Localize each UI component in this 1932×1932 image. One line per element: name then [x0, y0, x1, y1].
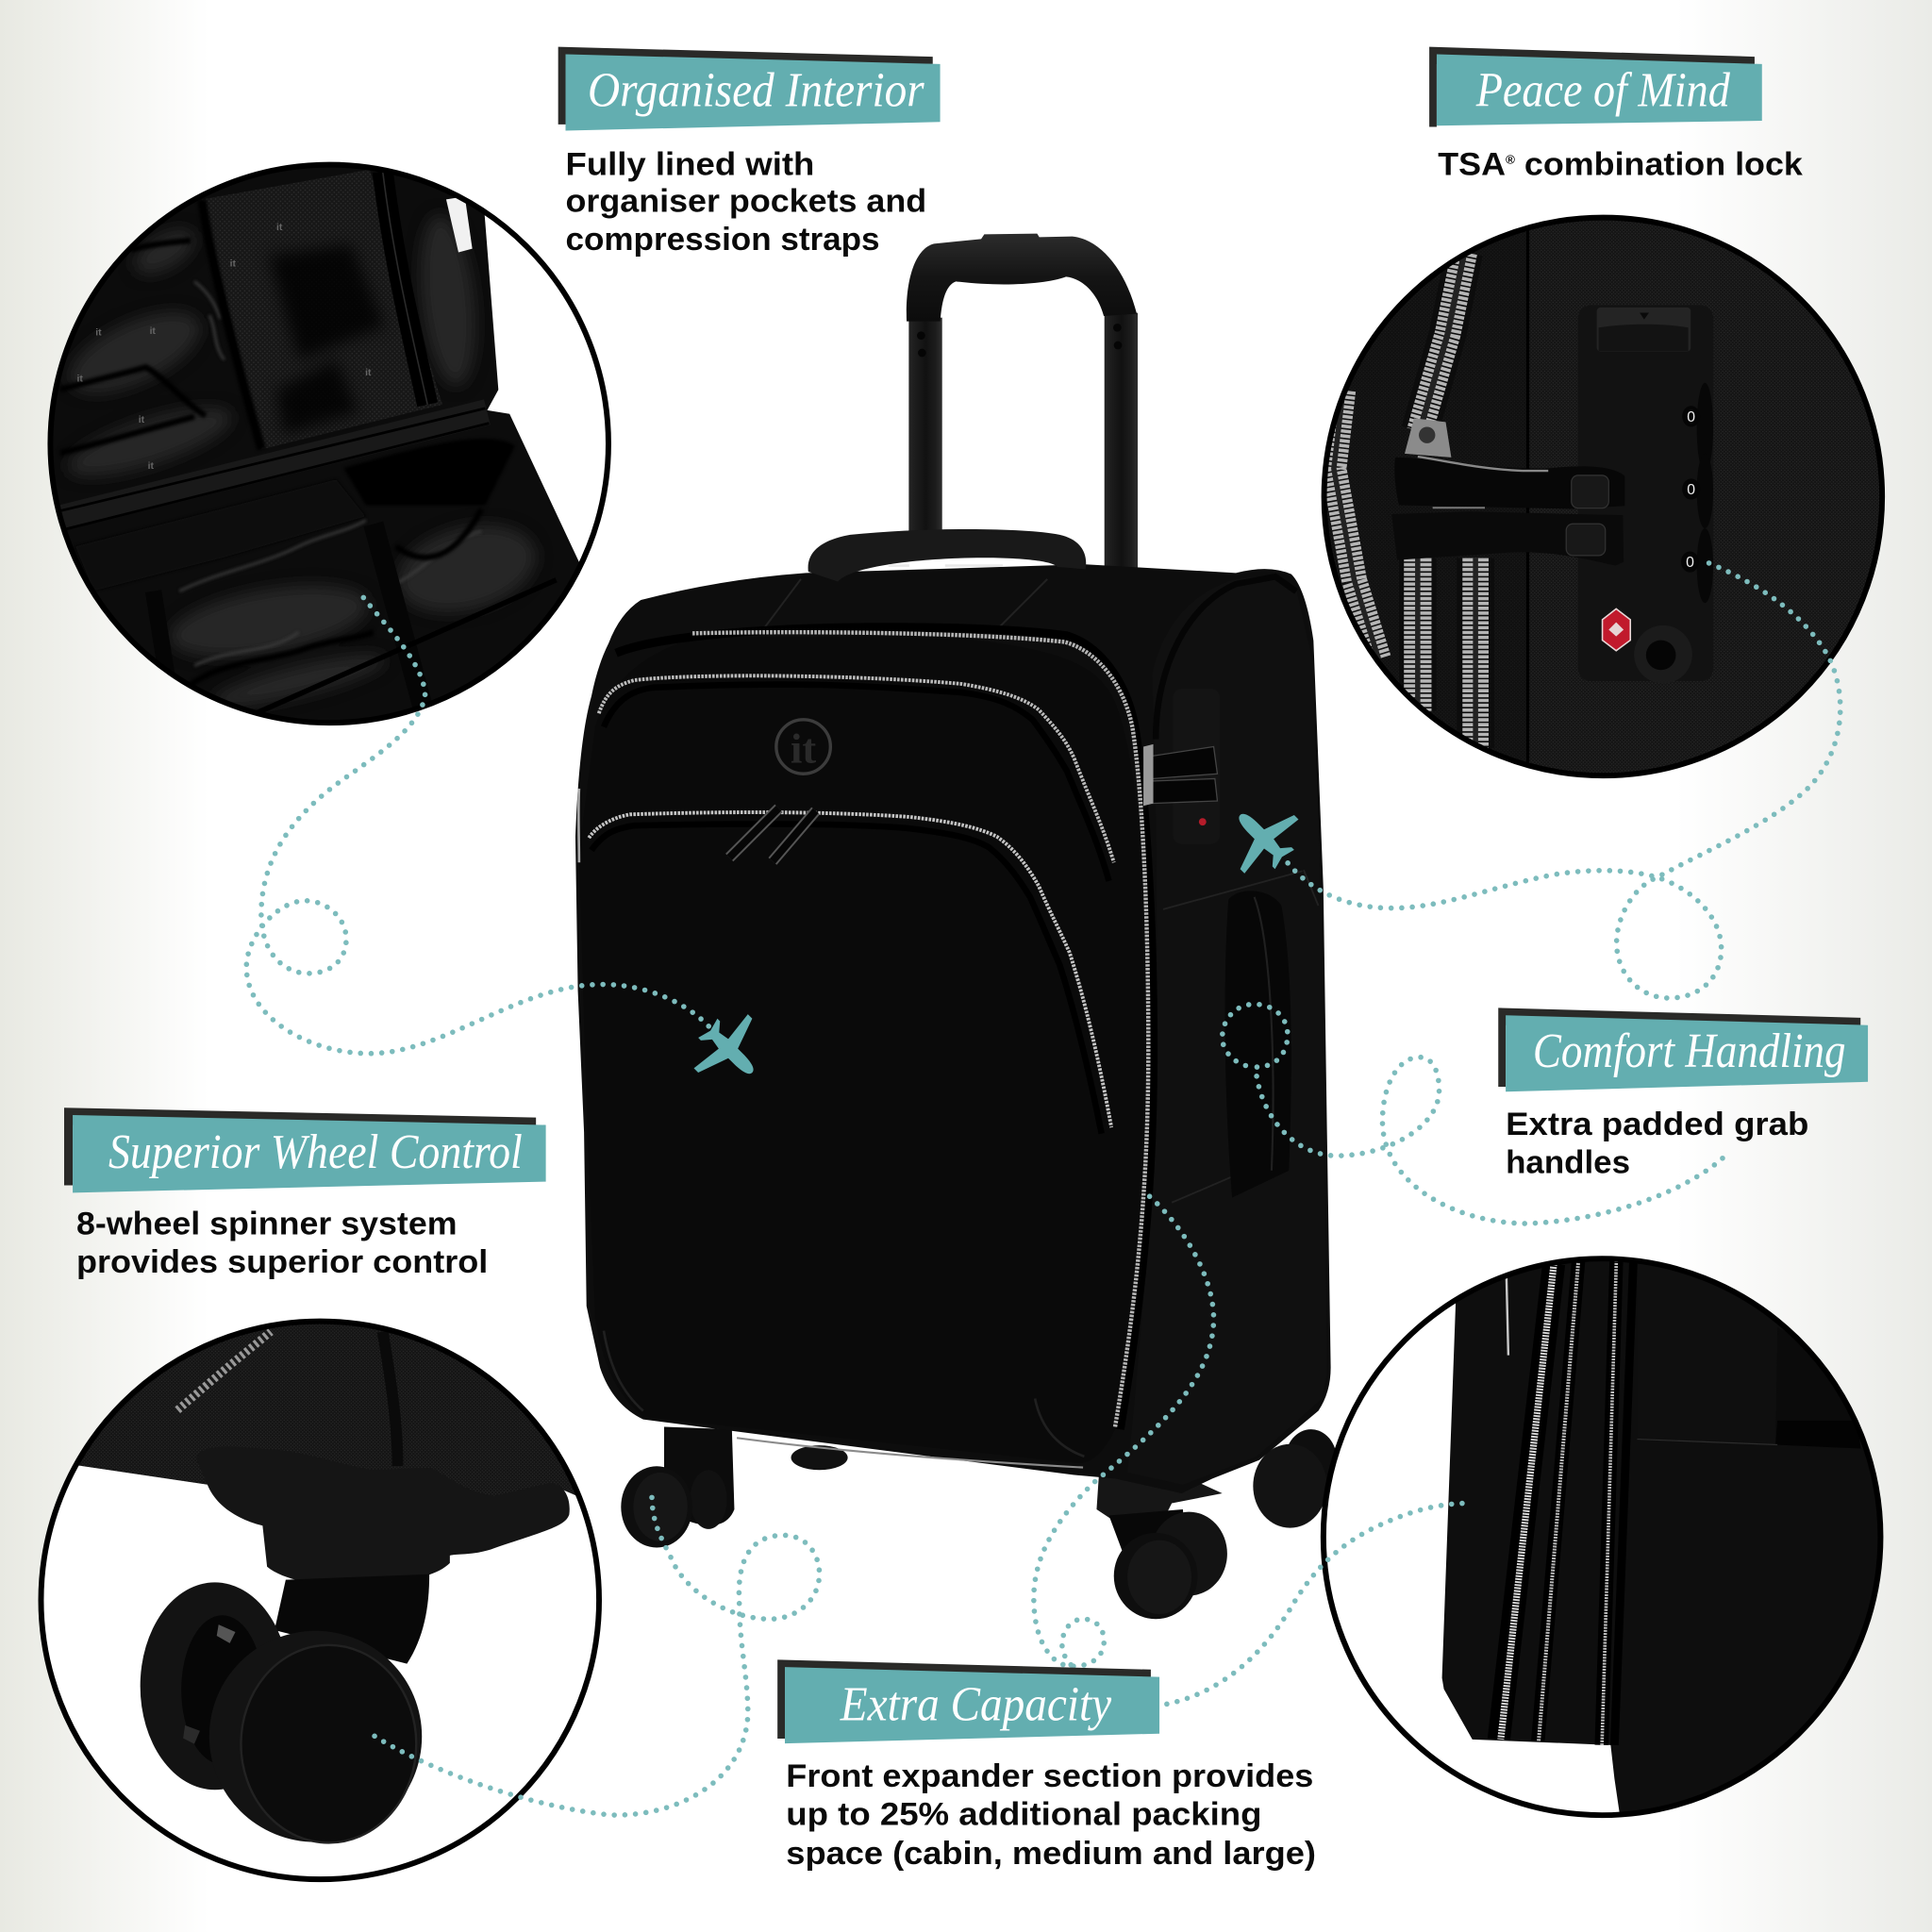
- side lock: [1143, 689, 1220, 844]
- TSA red diamond: [1603, 608, 1630, 651]
- dotted route: expander zip to extra capacity: [1034, 1196, 1214, 1666]
- wheel housing: [196, 1447, 570, 1586]
- circle: front expander detail: [1311, 1245, 1906, 1830]
- logo marks: [76, 223, 372, 472]
- heading: Superior Wheel Control: Superior Wheel Control: [108, 1124, 523, 1179]
- dotted route: extra capacity to expander circle: [1167, 1503, 1469, 1704]
- text: Superior Wheel Control description: 8-wheel spinner system: [76, 1207, 458, 1242]
- silver zippers: [578, 627, 1154, 1468]
- text: Peace of Mind description: combination lock: [1515, 146, 1804, 182]
- brand logo: it: [791, 724, 816, 772]
- text: Organised Interior description: compression straps: [566, 222, 880, 258]
- wheels: [621, 1426, 1337, 1619]
- front wheel: [209, 1631, 422, 1842]
- lock digits: 0: [1687, 482, 1695, 498]
- logo marks: it: [230, 259, 236, 270]
- icon: right plane: [1213, 788, 1311, 887]
- mesh pocket: [202, 170, 442, 449]
- zipper teeth: [1334, 252, 1475, 748]
- side grab handle: [1225, 891, 1291, 1198]
- text: Superior Wheel Control description: provides superior control: [76, 1244, 488, 1280]
- logo marks: it: [76, 374, 83, 384]
- dotted route: comfort handling to grab handle: [1223, 1004, 1723, 1224]
- key cylinder: [1634, 625, 1692, 684]
- heading: Peace of Mind: Peace of Mind: [1475, 62, 1731, 117]
- heading: Superior Wheel Control: [64, 1108, 546, 1192]
- zip strip: [383, 172, 427, 405]
- side panel: [1127, 575, 1327, 1485]
- lock body: [1578, 306, 1713, 681]
- satin wrinkles: [58, 212, 546, 717]
- carry handle: [808, 529, 1086, 581]
- zipper pulls: [729, 808, 816, 861]
- zippers: [1499, 1260, 1633, 1745]
- front panel: [579, 636, 1148, 1463]
- divider band: [60, 412, 487, 518]
- top panel seams: [764, 579, 1047, 628]
- side seams: [1163, 870, 1319, 1203]
- logo marks: it: [150, 326, 156, 337]
- luggage body: [575, 564, 1331, 1493]
- logo marks: it: [365, 368, 372, 378]
- heading: Organised Interior: Organised Interior: [588, 62, 924, 117]
- logo marks: it: [276, 223, 283, 233]
- text: Superior Wheel Control description: [76, 1207, 488, 1280]
- lock digits: 0: [1686, 555, 1694, 571]
- text: Organised Interior description: Fully lined with: [566, 146, 814, 182]
- text: Comfort Handling description: [1506, 1107, 1808, 1180]
- heading: Comfort Handling: [1498, 1008, 1868, 1091]
- circle: spinner wheel detail: [28, 1302, 613, 1887]
- heading: Extra Capacity: Extra Capacity: [840, 1676, 1112, 1731]
- suitcase product image: [575, 234, 1337, 1619]
- text: Peace of Mind description: TSA: [1438, 146, 1503, 182]
- text: Extra Capacity description: space (cabin, medium and large): [786, 1836, 1316, 1872]
- logo marks: it: [95, 328, 102, 339]
- lower compartment strap: [389, 562, 408, 611]
- brand logo: [776, 720, 830, 774]
- front corner creases: [604, 1331, 1084, 1457]
- metal slider: [1405, 418, 1451, 458]
- text: Extra Capacity description: up to 25% additional packing: [786, 1796, 1261, 1832]
- top handle strap: [1775, 1327, 1861, 1448]
- lock digits: 0: [1687, 409, 1695, 425]
- rear wheel: [141, 1582, 290, 1790]
- text: Comfort Handling description: handles: [1506, 1144, 1630, 1180]
- text: Peace of Mind description: ®: [1506, 153, 1515, 167]
- dotted route: lock to right plane: [1287, 563, 1840, 998]
- heading: Organised Interior: [558, 47, 941, 130]
- text: Organised Interior description: [566, 146, 926, 258]
- text: Extra Capacity description: Front expander section provides: [786, 1758, 1313, 1794]
- circle: organised interior detail: [38, 151, 623, 736]
- deep shadow: [343, 439, 515, 506]
- icon: left plane: [681, 1001, 779, 1100]
- text: Organised Interior description: organiser pockets and: [566, 184, 926, 220]
- heading: Extra Capacity: [777, 1659, 1159, 1743]
- heading: Comfort Handling: Comfort Handling: [1533, 1024, 1846, 1078]
- fork: [275, 1574, 429, 1664]
- telescopic trolley handle: [907, 234, 1138, 568]
- text: Comfort Handling description: Extra padded grab: [1506, 1107, 1808, 1142]
- logo marks: it: [139, 415, 145, 425]
- black zipper pulls: [1394, 458, 1624, 508]
- heading: Peace of Mind: [1429, 47, 1762, 127]
- lock digits: [1681, 406, 1698, 572]
- circle: TSA lock detail: [1321, 208, 1906, 792]
- dotted route: wheel circle to suitcase wheel: [375, 1493, 820, 1815]
- care label: [446, 196, 473, 253]
- dotted route: organised interior to left plane: [246, 597, 712, 1054]
- text: Extra Capacity description: [786, 1758, 1316, 1872]
- logo marks: it: [148, 461, 154, 472]
